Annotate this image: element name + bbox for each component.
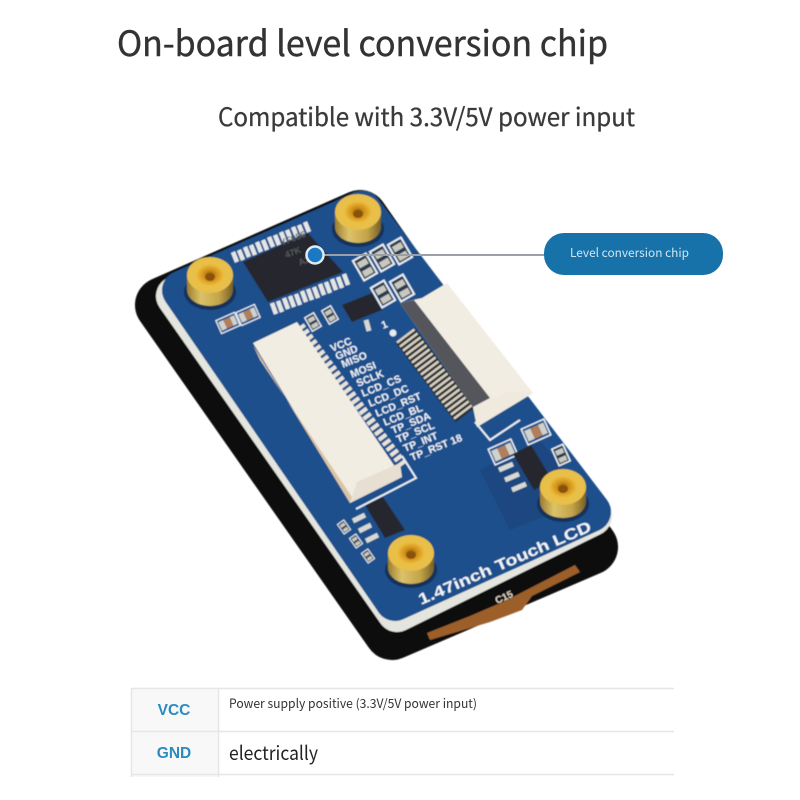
orange flex cable: C15	[494, 589, 515, 607]
pin labels: LCD_RST	[374, 390, 424, 420]
GND row	[157, 739, 318, 766]
VCC row: VCC	[158, 702, 190, 719]
chip lower left	[353, 497, 405, 541]
title: On-board level conversion chip	[117, 16, 608, 67]
VCC row	[158, 693, 477, 719]
silver frame layer	[176, 211, 592, 612]
board name: 1.47inch Touch LCD	[416, 519, 594, 609]
product photo: LCD board	[163, 194, 594, 640]
GND row: electrically	[229, 739, 318, 766]
chip lower right	[499, 445, 552, 490]
pin labels: 1	[380, 318, 390, 332]
small transistor	[342, 293, 396, 336]
GND row: GND	[157, 745, 191, 762]
pin labels: MOSI	[349, 360, 378, 381]
black glass panel	[163, 218, 590, 632]
pin labels: LCD_CS	[360, 373, 403, 400]
main chip: YF086	[279, 229, 307, 248]
pin labels: LCD_DC	[367, 383, 411, 410]
pin labels: TP_RST 18	[409, 432, 464, 464]
pin labels	[329, 318, 464, 464]
pin labels: TP_INT	[402, 430, 440, 455]
callout pill: Level conversion chip	[570, 244, 689, 261]
pin labels: LCD_BL	[382, 402, 425, 429]
subtitle: Compatible with 3.3V/5V power input	[218, 98, 636, 134]
blue circuit board	[182, 211, 591, 601]
passive components	[216, 238, 570, 563]
main chip: A29K	[297, 250, 323, 268]
callout leader line	[322, 254, 545, 256]
main chip: 47K	[283, 245, 303, 260]
orange flex cable	[427, 565, 580, 640]
13-pin white connector	[253, 322, 416, 509]
pin labels: TP_SDA	[390, 410, 433, 437]
brass standoffs	[184, 194, 589, 588]
pin labels: GND	[334, 343, 360, 363]
callout pill	[544, 233, 723, 275]
pin labels: MISO	[340, 350, 369, 371]
FPC connector	[400, 283, 533, 440]
VCC row: Power supply positive (3.3V/5V power input)	[229, 693, 477, 712]
pin labels: TP_SCL	[395, 419, 437, 446]
main chip	[233, 222, 348, 314]
pin labels: VCC	[329, 335, 354, 355]
pin labels: SCLK	[355, 368, 386, 390]
callout marker dot	[306, 246, 324, 264]
pin table	[131, 688, 674, 777]
